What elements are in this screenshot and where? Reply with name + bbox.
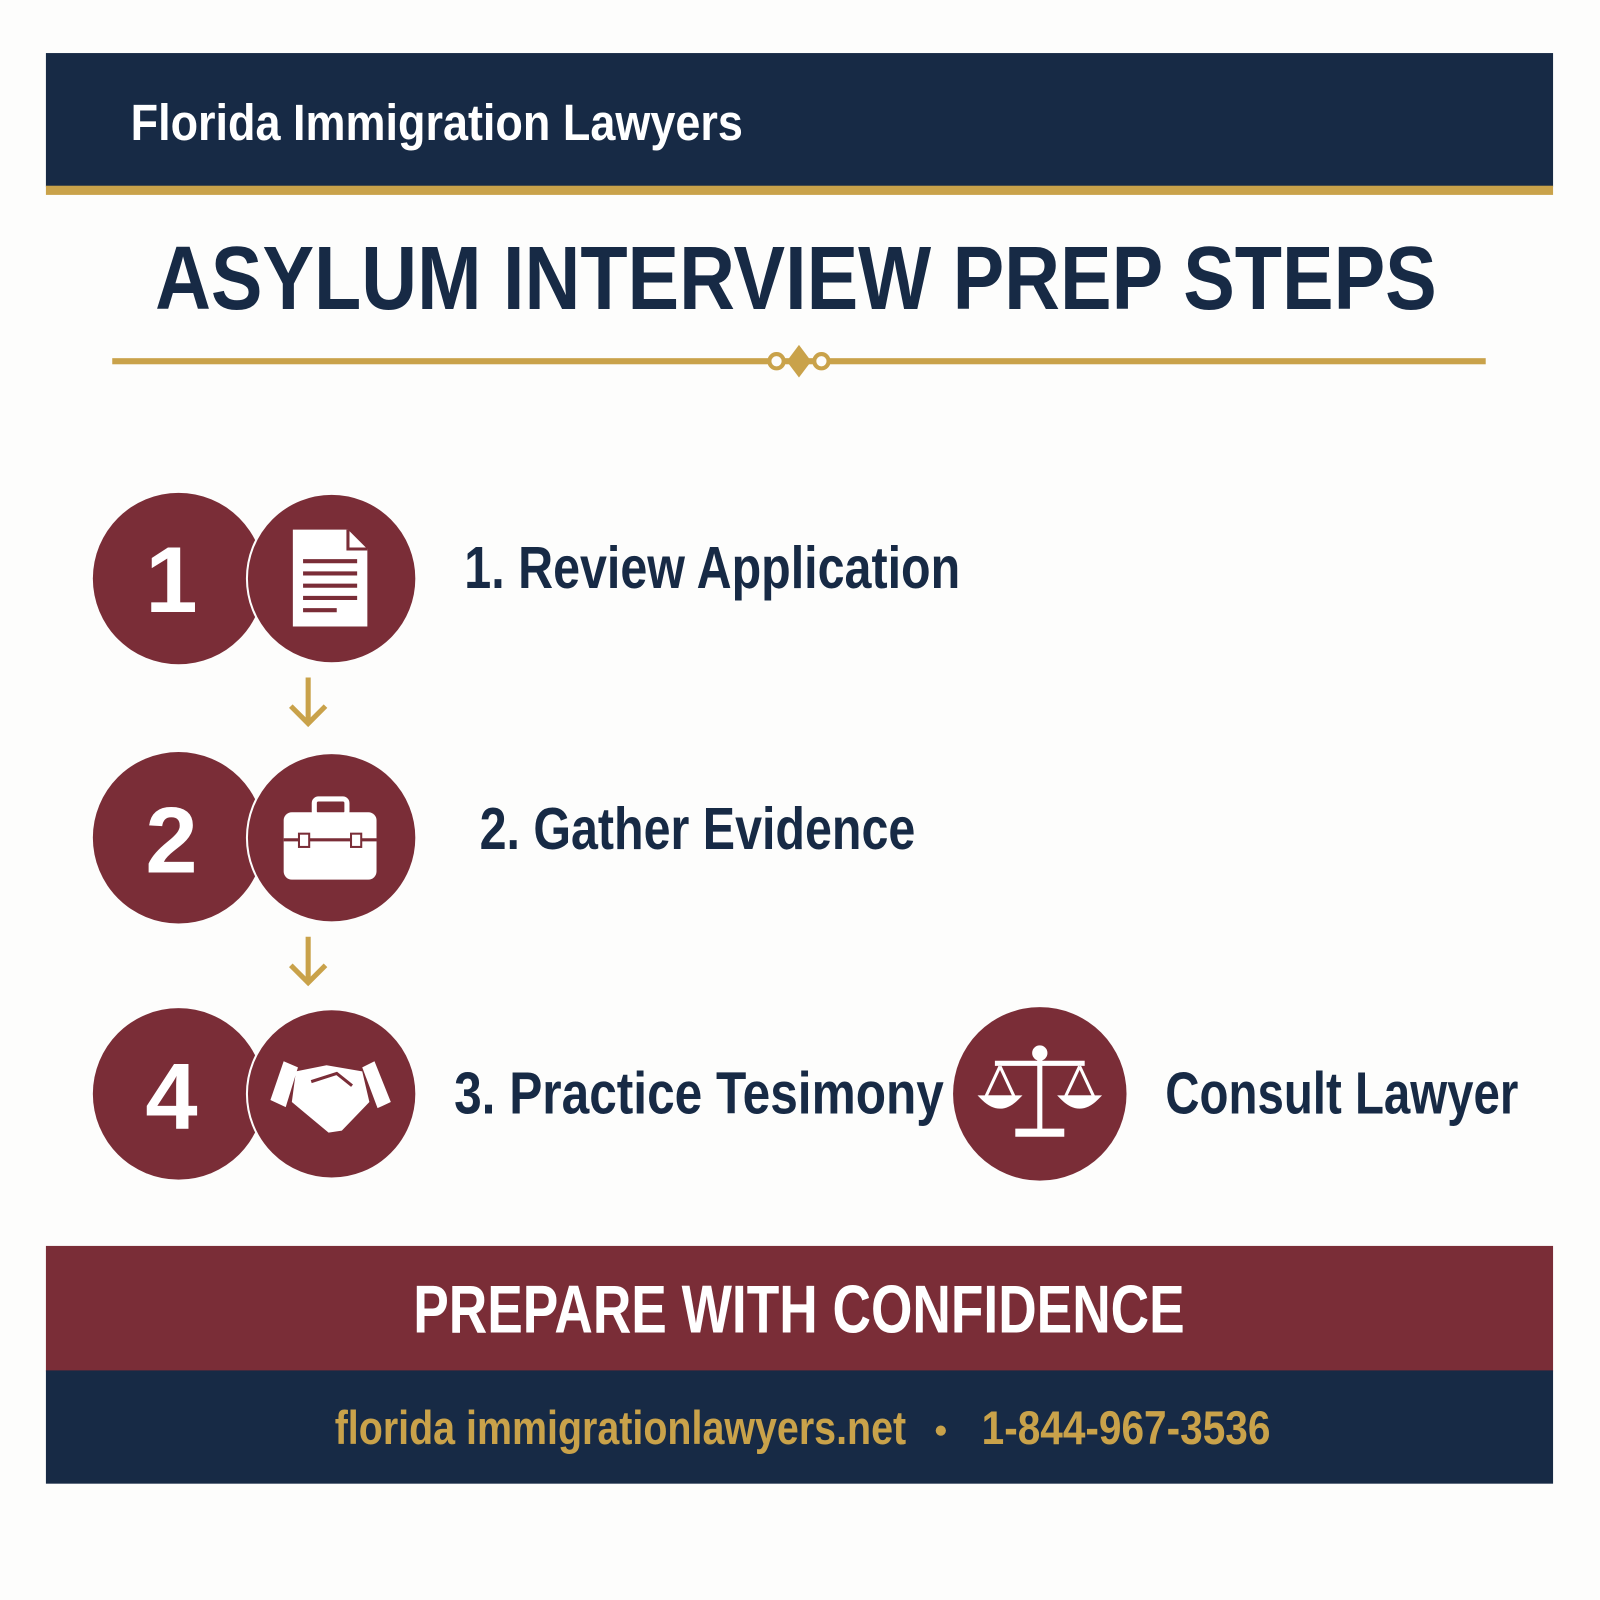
- step 2: [93, 752, 915, 923]
- icon: document: [293, 530, 367, 627]
- step 3: 4: [145, 1044, 198, 1149]
- title divider ornament: [112, 345, 1486, 378]
- step 1: [93, 493, 960, 664]
- banner: prepare with confidence: [46, 1246, 1553, 1371]
- arrow 2: [291, 937, 326, 983]
- step 2: 2: [145, 787, 198, 892]
- header bar: [46, 53, 1553, 195]
- banner: prepare with confidence: PREPARE WITH CONFIDENCE: [413, 1273, 1185, 1348]
- icon: scales: [984, 1048, 1096, 1133]
- footer contact bar: florida immigrationlawyers.net: [335, 1402, 906, 1454]
- consult lawyer: [953, 1007, 1518, 1181]
- step 3: [93, 1008, 944, 1180]
- consult label: Consult Lawyer: [1165, 1059, 1518, 1126]
- footer contact bar: [46, 1370, 1553, 1484]
- title: ASYLUM INTERVIEW PREP STEPS: [155, 229, 1437, 329]
- step 1 label: 1. Review Application: [464, 534, 960, 601]
- icon: briefcase: [284, 799, 377, 880]
- step 2 label: 2. Gather Evidence: [480, 795, 915, 862]
- footer contact bar: 1-844-967-3536: [982, 1402, 1270, 1454]
- icon: handshake: [270, 1061, 391, 1133]
- step 1: 1: [145, 527, 198, 632]
- arrow 1: [291, 678, 326, 723]
- header brand text: Florida Immigration Lawyers: [131, 94, 743, 151]
- step 3 label: 3. Practice Tesimony: [454, 1059, 944, 1126]
